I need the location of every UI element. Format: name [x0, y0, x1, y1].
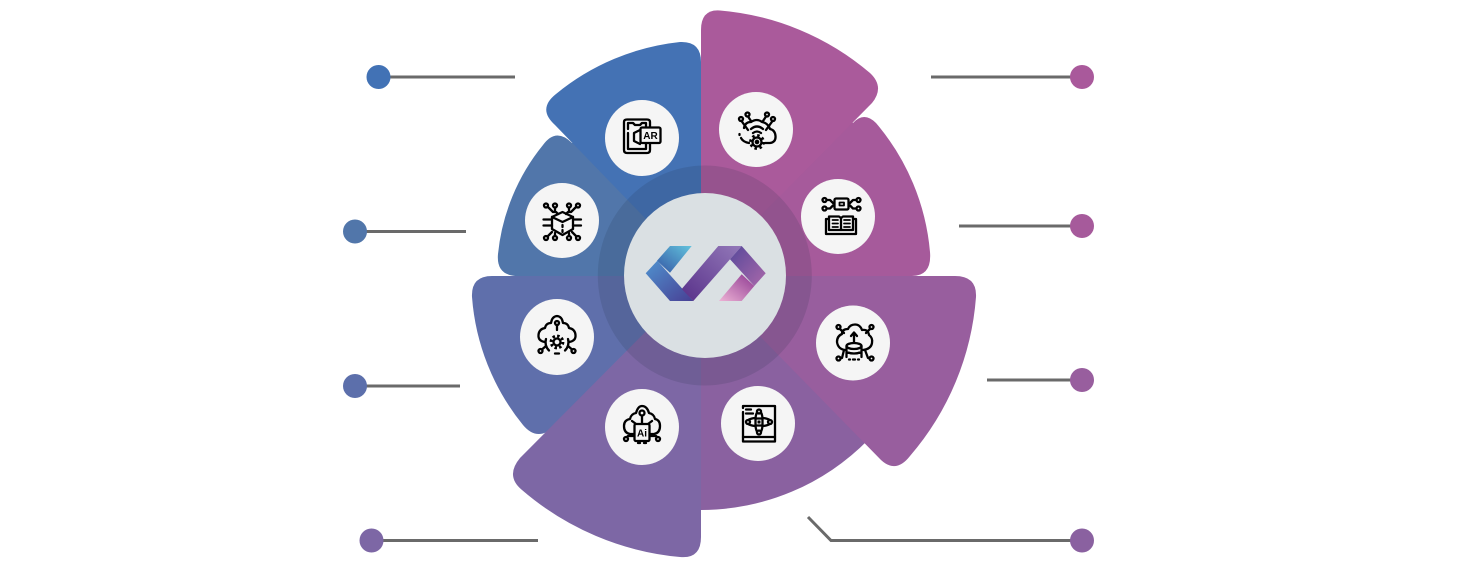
icon: cloud AI chip	[605, 389, 679, 465]
segment: top left blue	[546, 42, 701, 276]
icon: cloud gear	[520, 299, 594, 375]
connector: left lower	[343, 374, 460, 398]
segment: left upper	[498, 135, 701, 276]
icon: chip and open book	[801, 179, 875, 254]
icon: circuit cube	[525, 183, 599, 258]
segment: bottom	[701, 276, 868, 510]
connector: left upper	[343, 220, 466, 244]
connector: bottom right	[808, 517, 1094, 552]
icon: cloud network gear	[719, 92, 793, 167]
segment: bottom left	[513, 276, 701, 557]
connector: right upper	[959, 214, 1094, 238]
icon: cloud database	[816, 306, 890, 380]
icon: book with atom	[721, 386, 795, 461]
icon: AR phone: AR	[643, 131, 658, 142]
connector: right lower	[987, 368, 1094, 392]
segment: right middle upper	[701, 117, 930, 276]
connector: top left	[366, 65, 515, 89]
connector: bottom left	[360, 528, 538, 552]
segment: left lower	[472, 276, 701, 434]
logo	[646, 246, 766, 301]
segment: right lower	[701, 276, 976, 466]
segment: top right	[701, 10, 878, 276]
centre disc	[624, 193, 786, 358]
icon: cloud AI chip: Ai	[637, 428, 647, 440]
connector: top right	[931, 65, 1094, 89]
icon: AR phone	[605, 100, 679, 176]
translucent ring	[598, 166, 812, 386]
